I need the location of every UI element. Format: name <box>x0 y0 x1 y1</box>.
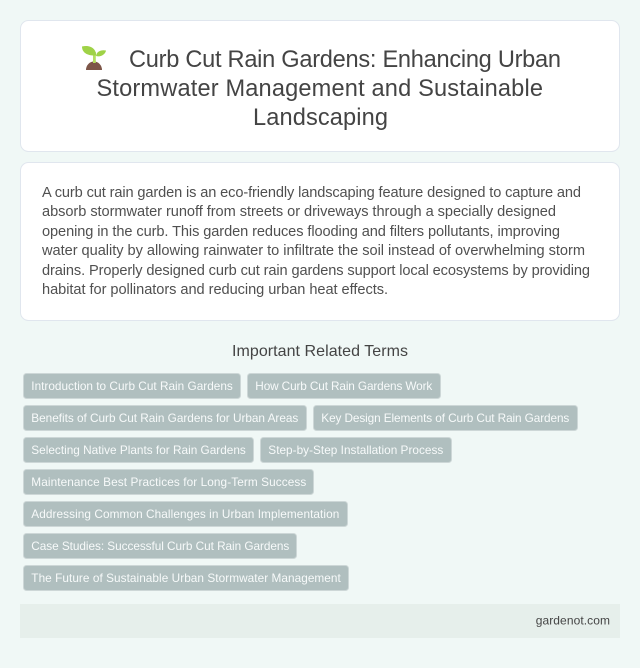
tag: native plants: Selecting Native Plants for Rain Gardens <box>31 443 246 457</box>
tag: native plants <box>24 438 254 462</box>
tag: benefits <box>24 406 306 430</box>
title: Stormwater Management and Sustainable <box>96 76 543 102</box>
icon: seedling <box>82 46 106 70</box>
footer <box>20 604 620 638</box>
footer: gardenot.com <box>536 614 610 628</box>
panel: description card <box>20 162 620 320</box>
tag: how it works: How Curb Cut Rain Gardens Work <box>255 379 432 393</box>
description text <box>41 185 590 298</box>
tag: installation <box>260 438 452 462</box>
description text: opening in the curb. This garden reduces flooding and filters pollutants, improving <box>42 224 560 240</box>
tag: case studies: Case Studies: Successful Curb Cut Rain Gardens <box>31 539 289 553</box>
tag: introduction: Introduction to Curb Cut Rain Gardens <box>31 379 233 393</box>
tag: key design elements: Key Design Elements of Curb Cut Rain Gardens <box>321 411 569 425</box>
heading: important related terms: Important Related Terms <box>232 343 408 360</box>
tag: benefits: Benefits of Curb Cut Rain Gardens for Urban Areas <box>31 411 298 425</box>
tag: introduction <box>24 374 240 398</box>
tag: how it works <box>248 374 440 398</box>
tag: key design elements <box>314 406 578 430</box>
tag: maintenance <box>24 470 314 494</box>
description text: absorb stormwater runoff from streets or driveways through a specially designed <box>42 204 556 220</box>
tag: installation: Step-by-Step Installation Process <box>268 443 443 457</box>
tag: case studies <box>24 534 296 558</box>
description text: habitat for pollinators and reducing urban heat effects. <box>42 282 388 298</box>
tag: future <box>24 566 348 590</box>
tag: challenges <box>24 502 348 526</box>
description text: water quality by allowing rainwater to infiltrate the soil instead of overwhelming storm <box>41 243 585 259</box>
description text: A curb cut rain garden is an eco-friendly landscaping feature designed to capture and <box>42 185 581 201</box>
panel: title card <box>20 20 620 152</box>
tag: future: The Future of Sustainable Urban Stormwater Management <box>31 571 342 585</box>
title: Curb Cut Rain Gardens: Enhancing Urban <box>129 47 561 73</box>
panel: related term tags <box>24 374 578 590</box>
tag: maintenance: Maintenance Best Practices for Long-Term Success <box>31 475 306 489</box>
description text: drains. Properly designed curb cut rain gardens support local ecosystems by providing <box>42 263 590 279</box>
tag: challenges: Addressing Common Challenges in Urban Implementation <box>31 507 339 521</box>
title <box>96 47 561 131</box>
title: Landscaping <box>253 105 388 131</box>
